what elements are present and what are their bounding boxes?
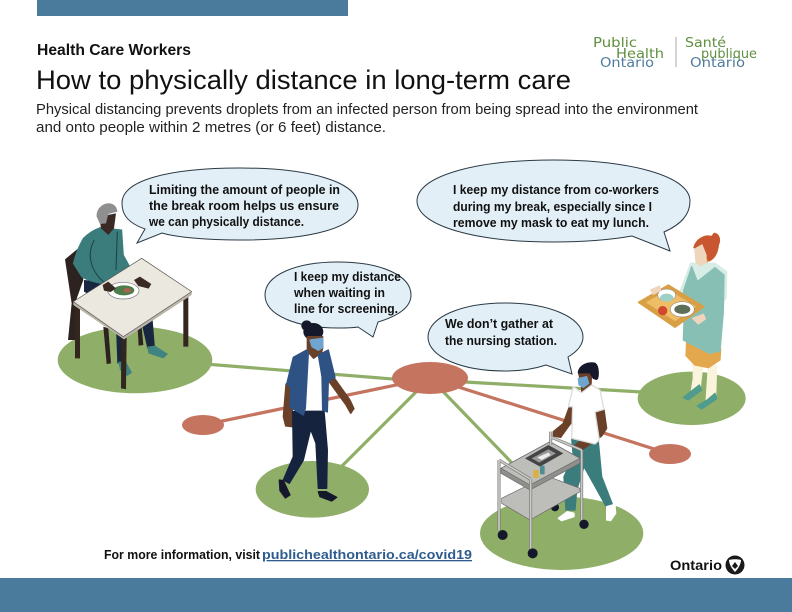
wheels <box>498 530 508 540</box>
left node oval <box>182 415 224 435</box>
speech bubble: break room: the break room helps us ensure <box>149 198 339 213</box>
cart <box>498 432 589 558</box>
speech bubble: co-workers <box>417 160 690 251</box>
network connector lines <box>203 364 670 468</box>
green circle under nurse <box>480 497 643 570</box>
central hub oval <box>392 362 468 394</box>
green circle under server <box>638 372 746 425</box>
logo: Public Health Ontario: Ontario <box>600 55 654 71</box>
green circle under woman <box>256 461 369 518</box>
logo: Public Health Ontario: Santé <box>685 35 726 51</box>
neck <box>696 258 707 282</box>
speech bubble: break room: Limiting the amount of people in <box>149 182 340 197</box>
footer: more information text: publichealthontario.ca/covid19 <box>262 547 472 562</box>
mask <box>310 338 323 350</box>
tray with food <box>638 285 704 327</box>
speech bubble: screening: line for screening. <box>294 301 398 316</box>
legs and shoes <box>116 327 127 363</box>
face <box>695 245 706 266</box>
hands <box>103 282 116 292</box>
hands <box>651 286 661 294</box>
subtitle: Health Care Workers: Health Care Workers <box>37 42 191 59</box>
head <box>99 213 116 235</box>
speech bubble: nursing station: the nursing station. <box>445 333 557 348</box>
figure: server carrying food tray <box>638 233 746 425</box>
white shirt <box>305 353 324 410</box>
speech bubble: break room <box>122 168 358 243</box>
intro text: Physical distancing prevents droplets from an infected person from being spread into the environment <box>36 101 699 118</box>
neck and face <box>307 337 323 362</box>
figure: woman walking with mask <box>256 320 369 518</box>
blue jacket <box>287 350 308 415</box>
teal vest <box>683 267 724 353</box>
footer: more information text <box>104 547 472 562</box>
logo: Public Health Ontario: publique <box>701 46 757 62</box>
logo: Public Health Ontario: Health <box>616 46 664 62</box>
shoes <box>607 504 616 521</box>
figure: nurse pushing cart <box>480 363 643 570</box>
sweater <box>73 228 137 285</box>
top banner bar <box>37 0 348 16</box>
logo: Public Health Ontario: Ontario <box>690 55 745 71</box>
back wheel <box>551 503 559 511</box>
skirt <box>686 342 721 368</box>
right node oval <box>649 444 691 464</box>
arms <box>283 384 295 427</box>
table <box>75 305 80 358</box>
shoes <box>683 385 702 400</box>
speech bubble: nursing station <box>428 303 583 374</box>
Ontario wordmark: Ontario <box>670 557 722 573</box>
shoes <box>279 480 290 498</box>
footer: more information text: For more information, visit <box>104 547 261 562</box>
speech bubble: screening: when waiting in <box>293 285 385 300</box>
figure: man at break room table <box>58 203 212 393</box>
red hair <box>694 233 719 261</box>
hair <box>301 320 312 331</box>
cardigan sleeves <box>680 263 727 320</box>
hair <box>578 363 598 379</box>
speech bubble: co-workers: I keep my distance from co-workers <box>453 182 659 197</box>
neck and face <box>579 372 592 393</box>
pants <box>283 411 327 488</box>
bottles <box>533 470 539 478</box>
intro text: and onto people within 2 metres (or 6 feet) distance. <box>36 119 386 136</box>
speech bubble: break room: we can physically distance. <box>148 214 304 229</box>
chair <box>65 248 143 364</box>
speech bubble: nursing station: We don’t gather at <box>445 316 554 331</box>
speech bubble: screening: I keep my distance <box>294 269 401 284</box>
arms <box>573 409 607 449</box>
bottom banner bar <box>0 578 792 612</box>
speech bubble: co-workers: remove my mask to eat my lunch. <box>453 215 649 230</box>
speech bubble: screening <box>265 262 411 337</box>
intro text <box>36 101 699 136</box>
speech bubble: co-workers: during my break, especially since I <box>453 199 652 214</box>
white shirt <box>568 385 604 444</box>
logo: Public Health Ontario <box>593 35 757 71</box>
legs <box>691 363 703 396</box>
plate of food <box>108 282 139 299</box>
grey hair <box>97 203 117 224</box>
icon: Ontario trillium <box>726 556 744 574</box>
mask <box>578 377 589 387</box>
tray on cart <box>525 445 563 467</box>
title: How to physically distance in long-term care <box>36 65 571 95</box>
logo: Public Health Ontario: Public <box>593 35 637 51</box>
green circle under man <box>58 327 212 393</box>
pants <box>564 438 613 510</box>
